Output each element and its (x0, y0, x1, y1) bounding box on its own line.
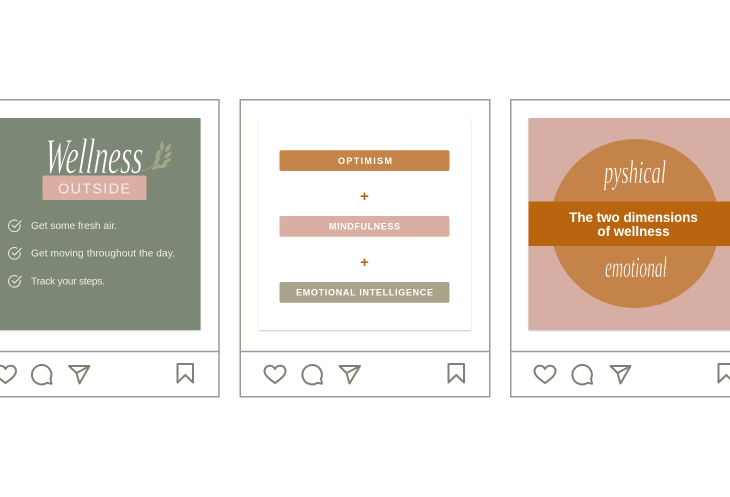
icon: comment (572, 365, 592, 384)
icon: heart (534, 366, 556, 383)
icon: check (9, 276, 22, 287)
band heading line two: of wellness (597, 224, 670, 239)
title tag background (42, 176, 146, 200)
post image background (528, 118, 730, 330)
icon: heart (0, 366, 16, 383)
panel: wellness outside post (0, 100, 219, 397)
checklist (9, 220, 175, 288)
icon: bookmark (718, 364, 730, 382)
bar: emotional intelligence: EMOTIONAL INTELLIGENCE (296, 288, 433, 298)
icon: leaf sprig (140, 141, 173, 171)
post frame (240, 100, 490, 397)
bar: optimism: OPTIMISM (338, 156, 392, 166)
icon: check (9, 248, 22, 259)
panel: optimism mindfulness post (240, 100, 490, 397)
bar: mindfulness: MINDFULNESS (329, 222, 400, 232)
circle (550, 139, 720, 308)
panel: two dimensions post (510, 100, 730, 397)
script word: pyshical: pyshical (603, 155, 666, 191)
icon: send (610, 366, 630, 384)
icon: check (9, 220, 22, 232)
plus sign: + (360, 254, 369, 271)
script word: emotional: emotional (605, 251, 667, 284)
list item: Track your steps. (31, 276, 105, 288)
icon: comment (302, 365, 322, 384)
icon: send (69, 366, 90, 384)
icon: comment (32, 365, 52, 384)
plus sign: + (360, 188, 369, 205)
post image background (258, 118, 471, 330)
post frame (0, 100, 219, 397)
bar: optimism (280, 150, 450, 171)
list item: Get some fresh air. (31, 221, 117, 232)
bar: emotional intelligence (280, 282, 450, 303)
bar: mindfulness (280, 216, 450, 237)
tag text: OUTSIDE (58, 182, 130, 198)
icon: send (340, 366, 360, 384)
post image background (0, 118, 200, 330)
list item: Get moving throughout the day. (31, 248, 175, 260)
post frame (511, 100, 730, 397)
band (528, 202, 730, 246)
icon: heart (264, 366, 286, 383)
icon: bookmark (178, 364, 193, 382)
icon: bookmark (448, 364, 464, 382)
script title: Wellness (43, 128, 145, 184)
band heading: The two dimensions (569, 210, 698, 225)
